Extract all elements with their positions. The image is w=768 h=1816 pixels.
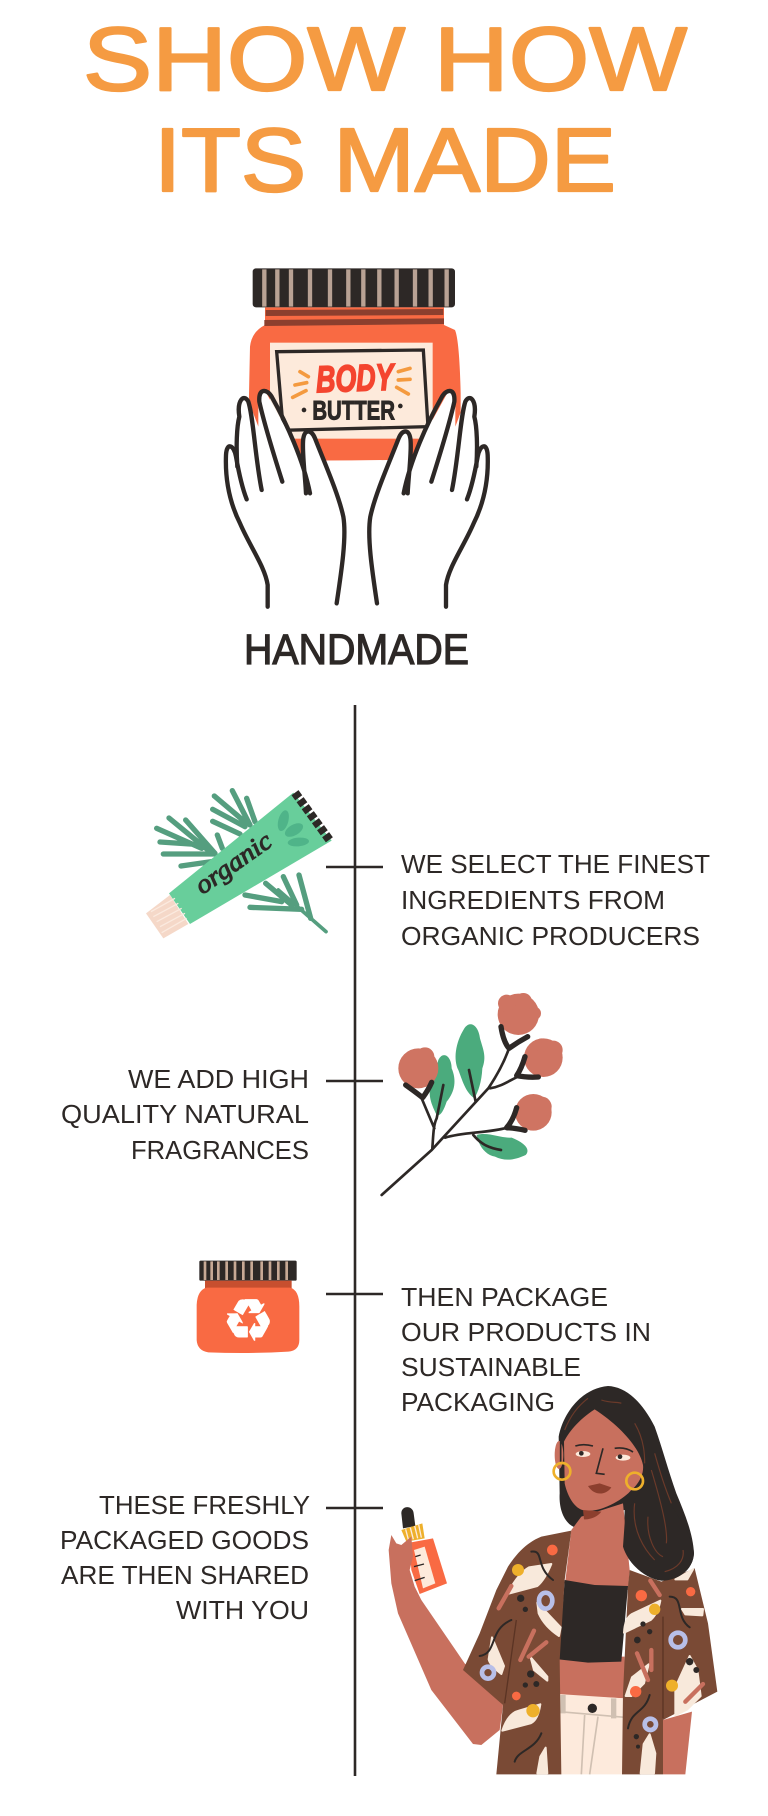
tube leaf mark: [276, 809, 309, 847]
step 1 text: WE SELECT THE FINEST: [401, 851, 710, 879]
icon: flowering branch: [382, 993, 563, 1195]
step 4 text: WITH YOU: [176, 1597, 309, 1625]
illustration: woman holding serum bottle: [389, 1386, 717, 1774]
serum bottle: [401, 1507, 447, 1594]
leaves: [430, 1024, 527, 1160]
step 2 text: [61, 1066, 309, 1165]
organic script: organic: [189, 826, 278, 900]
timeline: [326, 705, 383, 1776]
step 4 text: THESE FRESHLY: [99, 1492, 310, 1520]
facial features: [561, 1442, 633, 1494]
step 2 text: WE ADD HIGH: [128, 1066, 309, 1094]
icon: organic tube with rosemary: [146, 791, 332, 938]
recycle symbol: ♻: [223, 1287, 274, 1354]
trousers: [558, 1694, 625, 1774]
title: ITS MADE: [154, 111, 616, 211]
heading: handmade: HANDMADE: [244, 626, 469, 674]
jar label: BODY: [315, 356, 396, 400]
icon: recycled jar: [197, 1261, 299, 1354]
step 4 text: ARE THEN SHARED: [61, 1562, 309, 1590]
hair over shoulder: [623, 1477, 694, 1581]
earrings: [554, 1463, 643, 1489]
step 4 text: PACKAGED GOODS: [60, 1527, 309, 1555]
jar lid: [253, 268, 455, 307]
shirt: [463, 1531, 717, 1774]
step 3 text: PACKAGING: [401, 1389, 555, 1417]
crop top: [559, 1580, 628, 1663]
hair strands: [565, 1398, 683, 1572]
hair: [559, 1386, 694, 1581]
step 3 text: [401, 1284, 651, 1417]
blooms: [398, 993, 563, 1131]
step 3 text: THEN PACKAGE: [401, 1284, 608, 1312]
step 2 text: FRAGRANCES: [131, 1137, 309, 1165]
jar label: BUTTER: [312, 395, 395, 425]
tube: [169, 793, 332, 924]
step 1 text: ORGANIC PRODUCERS: [401, 923, 700, 951]
stems: [382, 1048, 520, 1195]
jar body: [248, 307, 461, 461]
arm and hand: [389, 1535, 503, 1745]
step 2 text: QUALITY NATURAL: [61, 1101, 309, 1129]
step 3 text: SUSTAINABLE: [401, 1354, 581, 1382]
jar label: [270, 343, 433, 439]
step 1 text: [401, 851, 710, 951]
neck and face: [555, 1409, 643, 1590]
step 4 text: [60, 1492, 310, 1625]
step 1 text: INGREDIENTS FROM: [401, 887, 665, 915]
stomach and right arm: [558, 1657, 692, 1774]
left hand: [226, 391, 345, 607]
bloom calyces: [406, 1027, 538, 1130]
title: [83, 10, 687, 211]
icon: body butter jar held by hands: [226, 268, 488, 607]
right hand: [369, 391, 488, 607]
rosemary sprigs: [157, 791, 326, 932]
shirt pattern: [489, 1564, 703, 1773]
title: SHOW HOW: [83, 10, 687, 110]
step 3 text: OUR PRODUCTS IN: [401, 1319, 651, 1347]
